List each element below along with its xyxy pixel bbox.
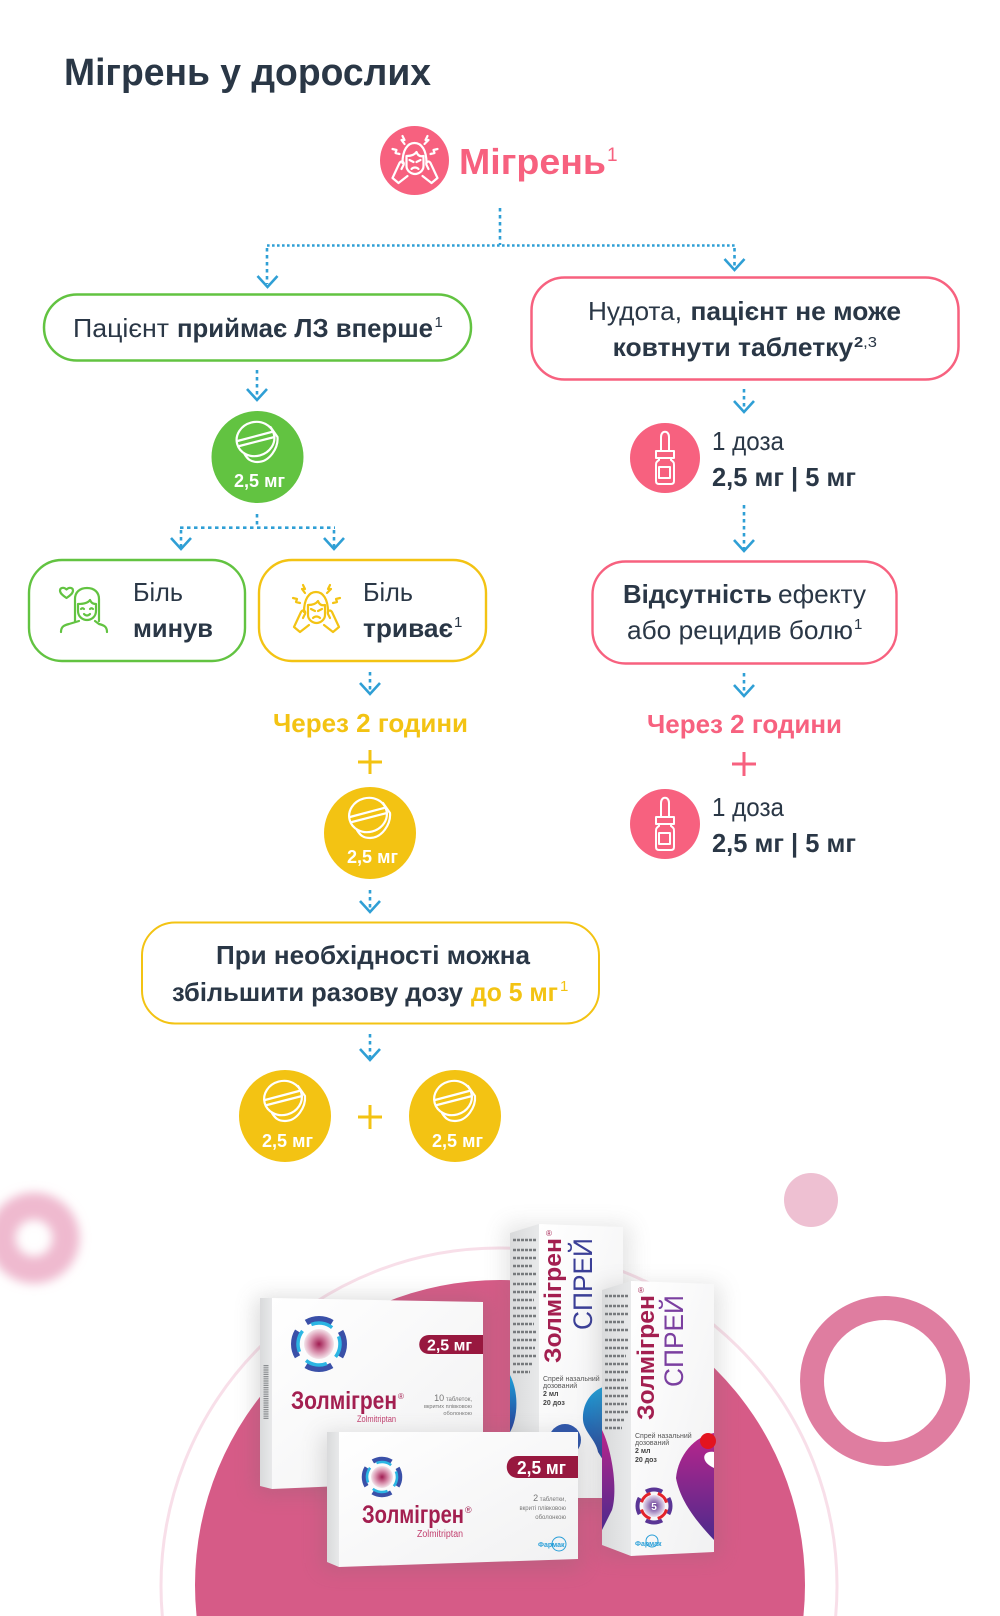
product: tablet box 2: 2 таблетки, — [533, 1493, 566, 1503]
title: Мігрень у дорослих — [64, 52, 431, 94]
panel: pain gone: Біль — [133, 577, 183, 607]
decoration: small pink circle — [784, 1173, 838, 1227]
product: tablet box 2: Золмігрен — [362, 1501, 464, 1529]
arrow — [360, 890, 380, 912]
product: spray box front: Фармак — [635, 1541, 662, 1548]
panel: first-time patient: 1 — [434, 314, 443, 331]
panel: no effect or recurrence: 1 — [854, 616, 862, 633]
product: tablet box 2: Фармак — [538, 1542, 565, 1549]
product: tablet box 10: оболонкою — [443, 1411, 472, 1417]
product: spray box back: 2 мл — [543, 1391, 558, 1398]
dose: spray repeat: 1 доза — [712, 792, 784, 822]
panel: increase dose: збільшити разову дозу — [172, 977, 464, 1007]
label: after 2 hours pink: Через 2 години — [647, 709, 842, 739]
dose: tablet left — [239, 1070, 331, 1162]
arrow — [734, 505, 754, 551]
panel: no effect or recurrence — [592, 562, 896, 664]
product: tablet box 10: Zolmitriptan — [357, 1414, 396, 1424]
product: spray box front: 20 доз — [635, 1457, 657, 1464]
dose: tablet right — [409, 1070, 501, 1162]
product: spray box back: СПРЕЙ — [567, 1238, 598, 1330]
arrow: split from migraine — [258, 208, 744, 287]
panel: nausea: пацієнт не може — [690, 296, 901, 326]
product: tablet box 10 — [256, 1298, 488, 1493]
icon: happy woman — [60, 588, 107, 632]
dose: spray repeat: 2,5 мг | 5 мг — [712, 828, 856, 858]
dose: 2,5 mg green tablet: 2,5 мг — [234, 471, 285, 491]
product: tablet box 2 — [322, 1432, 582, 1570]
product: spray box back — [505, 1224, 630, 1505]
product: spray box front: 2 мл — [635, 1448, 650, 1455]
product: spray box back: ® — [546, 1229, 552, 1238]
panel: first-time patient: Пацієнт — [73, 313, 169, 343]
icon: plus pink — [732, 752, 756, 776]
decoration: right ring — [812, 1308, 958, 1454]
product: tablet box 10: ® — [398, 1392, 404, 1401]
panel: pain gone: минув — [133, 613, 213, 643]
decoration: large circle — [195, 1280, 805, 1616]
dose: tablet left: 2,5 мг — [262, 1131, 313, 1151]
panel: pain persists: 1 — [454, 614, 462, 631]
product: tablet box 10: 10 таблеток, — [434, 1393, 472, 1403]
product: spray box front: дозований — [635, 1439, 669, 1447]
panel: first-time patient — [44, 294, 471, 360]
panel: pain persists — [259, 560, 486, 661]
decoration: thin ring — [161, 1248, 837, 1616]
product: spray box front: ® — [638, 1286, 644, 1295]
product: spray box front: СПРЕЙ — [658, 1295, 689, 1387]
panel: pain gone — [29, 560, 245, 661]
product: spray box back: 20 доз — [543, 1400, 565, 1407]
arrow — [360, 1034, 380, 1060]
panel: pain persists: Біль — [363, 577, 413, 607]
icon: spray logo — [638, 1490, 670, 1522]
arrow — [360, 672, 380, 694]
panel: nausea: Нудота, — [588, 296, 682, 326]
heading: migraine: Мігрень — [459, 141, 606, 182]
arrow — [247, 370, 267, 400]
product: spray box back: Спрей назальний — [543, 1375, 600, 1383]
product: tablet box 10: Золмігрен — [291, 1387, 397, 1415]
dose: 2,5 mg yellow tablet: 2,5 мг — [347, 847, 398, 867]
panel: nausea — [532, 278, 958, 380]
icon: plus yellow — [358, 750, 382, 774]
icon: plus between tablets — [358, 1105, 382, 1129]
product: spray box front — [598, 1281, 720, 1557]
panel: first-time patient: приймає ЛЗ вперше — [177, 313, 433, 343]
product: spray box front: Золмігрен — [633, 1295, 660, 1420]
panel: pain persists: триває — [363, 613, 453, 643]
panel: increase dose — [142, 922, 599, 1024]
icon: spray logo: 5 — [651, 1502, 657, 1513]
panel: increase dose: 1 — [560, 978, 568, 995]
product: spray box front: Спрей назальний — [635, 1432, 692, 1440]
dose: 2,5 mg yellow tablet — [324, 787, 416, 879]
dose: tablet right: 2,5 мг — [432, 1131, 483, 1151]
dose: spray — [630, 423, 856, 493]
panel: increase dose: При необхідності можна — [216, 940, 531, 970]
product: spray box back: дозований — [543, 1382, 577, 1390]
label: after 2 hours yellow: Через 2 години — [273, 708, 468, 738]
panel: nausea: ковтнути таблетку — [613, 332, 854, 362]
product: tablet box 2: вкриті плівковою — [519, 1506, 566, 1512]
panel: no effect or recurrence: Відсутність — [623, 579, 772, 609]
product: tablet box 2: 2,5 мг — [517, 1458, 566, 1478]
product: tablet box 10: вкритих плівковою — [424, 1404, 472, 1410]
dose: 2,5 mg green tablet — [212, 411, 304, 503]
product: tablet box 2: ® — [465, 1505, 472, 1515]
icon: headache — [293, 585, 340, 632]
product: tablet box 2: Zolmitriptan — [417, 1529, 463, 1540]
decoration: blurred ring — [2, 1206, 66, 1270]
arrow — [734, 389, 754, 412]
dose: spray repeat — [630, 789, 856, 859]
arrow — [734, 673, 754, 696]
product: spray box back: Золмігрен — [540, 1238, 567, 1363]
migraine header — [380, 126, 618, 195]
panel: no effect or recurrence: ефекту — [778, 579, 866, 609]
arrow: split from tablet — [171, 514, 344, 549]
product: tablet box 10: 2,5 мг — [427, 1338, 472, 1354]
product: tablet box 2: оболонкою — [535, 1515, 566, 1521]
icon: brand logo small — [364, 1459, 400, 1495]
dose: spray: 2,5 мг | 5 мг — [712, 462, 856, 492]
icon: migraine head — [380, 126, 449, 195]
dose: spray: 1 доза — [712, 426, 784, 456]
panel: no effect or recurrence: або рецидив болю — [627, 615, 853, 645]
panel: increase dose: до 5 мг — [471, 977, 558, 1007]
heading: migraine: 1 — [607, 145, 618, 166]
panel: nausea: 2,3 — [854, 334, 877, 351]
icon: brand logo — [294, 1319, 344, 1369]
